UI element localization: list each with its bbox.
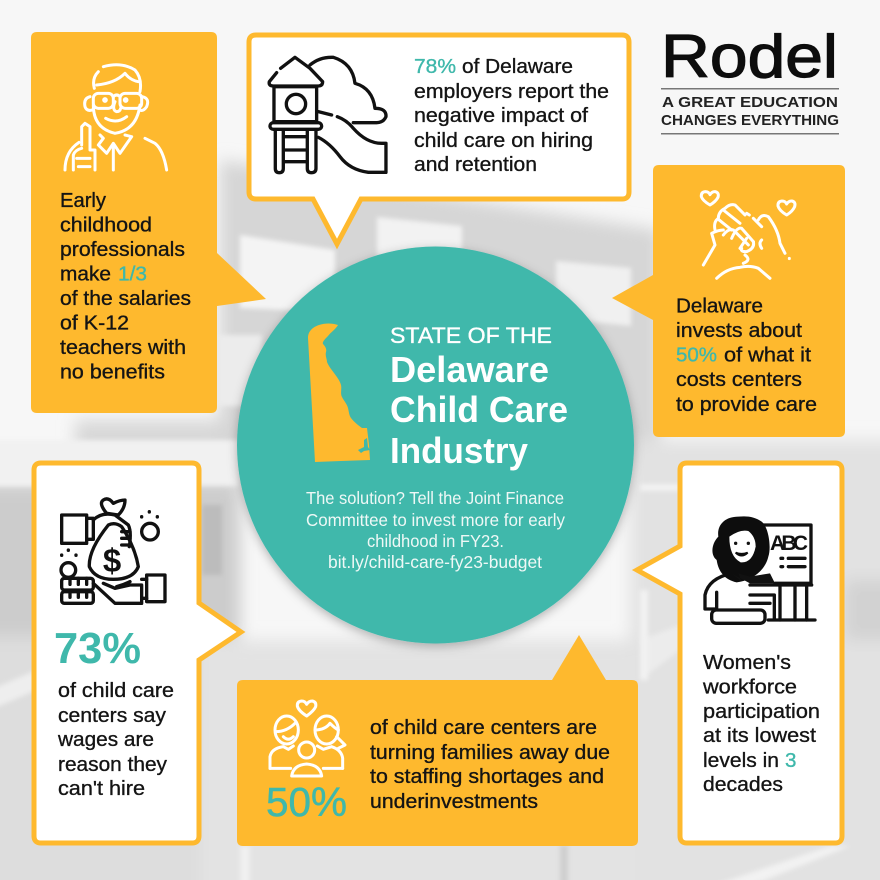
panel: wages [34, 463, 241, 843]
panel text: invests about [676, 319, 802, 342]
logo: Rodel [661, 23, 839, 134]
icon: teacher at blackboard [705, 516, 815, 623]
panel text: of child care [58, 679, 174, 702]
panel text: Delaware [676, 294, 763, 318]
icon: money bag exchange [61, 499, 165, 603]
circle heading [390, 323, 568, 471]
panel text [370, 716, 610, 813]
panel text: underinvestments [370, 790, 538, 813]
panel text: no benefits [60, 360, 165, 384]
call to action text: bit.ly/child-care-fy23-budget [328, 552, 542, 572]
panel text: child care on hiring [414, 129, 593, 152]
panel: state investment [612, 165, 845, 437]
panel text: turning families away due [370, 741, 610, 764]
panel text: of Delaware [462, 55, 573, 78]
panel text: of K-12 [60, 312, 129, 334]
panel: employers [249, 35, 629, 244]
panel text: 78% [414, 55, 456, 78]
panel text: levels in [703, 749, 779, 772]
panel text: costs centers [676, 368, 802, 391]
panel text: 50% [676, 344, 717, 366]
logo: Rodel: CHANGES EVERYTHING [661, 112, 839, 129]
circle heading: Delaware [390, 349, 549, 390]
panel text: of what it [724, 344, 811, 366]
panel text: childhood [60, 214, 152, 236]
panel text: centers say [58, 704, 167, 727]
icon: teacher with glasses [65, 65, 167, 170]
panel text: Women's [703, 651, 791, 674]
logo: Rodel: A GREAT EDUCATION [662, 94, 838, 111]
panel text: teachers with [60, 336, 186, 359]
panel text: and retention [414, 153, 537, 176]
panel text: workforce [702, 676, 797, 698]
panel: salaries [31, 32, 266, 413]
panel text [414, 55, 609, 176]
panel text [676, 294, 817, 416]
icon text: ABC: ABC [770, 532, 808, 555]
panel text: of child care centers are [370, 716, 597, 739]
panel text: to provide care [676, 393, 817, 416]
panel text: 3 [785, 749, 796, 772]
panel text: reason they [58, 753, 168, 776]
panel text: at its lowest [703, 724, 816, 747]
panel text [57, 679, 174, 800]
panel text: professionals [60, 238, 185, 261]
call to action text: childhood in FY23. [367, 531, 504, 551]
call to action text [306, 488, 565, 572]
panel text: can't hire [58, 777, 145, 800]
panel text: wages are [57, 728, 154, 751]
panel: families turned away [237, 635, 638, 846]
panel text: decades [703, 773, 783, 796]
logo: Rodel: Rodel [661, 23, 838, 90]
call to action text: Committee to invest more for early [306, 510, 565, 530]
central circle [237, 246, 634, 644]
panel text: make [60, 262, 111, 286]
panel text: of the salaries [60, 287, 191, 310]
panel text: Early [60, 189, 107, 212]
icon text: dollar sign: $ [103, 542, 121, 579]
panel text: participation [703, 700, 820, 723]
panel text: employers report the [414, 80, 609, 103]
circle heading: Child Care [390, 389, 568, 430]
panel text: to staffing shortages and [370, 765, 604, 788]
icon: playground slide [269, 57, 386, 173]
map of Delaware [308, 324, 370, 462]
big stat 50%: 50% [266, 779, 347, 825]
panel text [60, 189, 191, 384]
panel text [702, 651, 820, 796]
circle heading: Industry [390, 430, 528, 471]
icon: clasped hands with hearts [701, 192, 795, 278]
panel text: 1/3 [118, 262, 147, 286]
call to action text: The solution? Tell the Joint Finance [306, 488, 564, 508]
panel text: negative impact of [414, 104, 588, 127]
circle heading: STATE OF THE [390, 323, 552, 348]
big stat 73%: 73% [54, 625, 141, 673]
icon: family with heart [270, 701, 345, 776]
panel: women's workforce [637, 463, 842, 843]
